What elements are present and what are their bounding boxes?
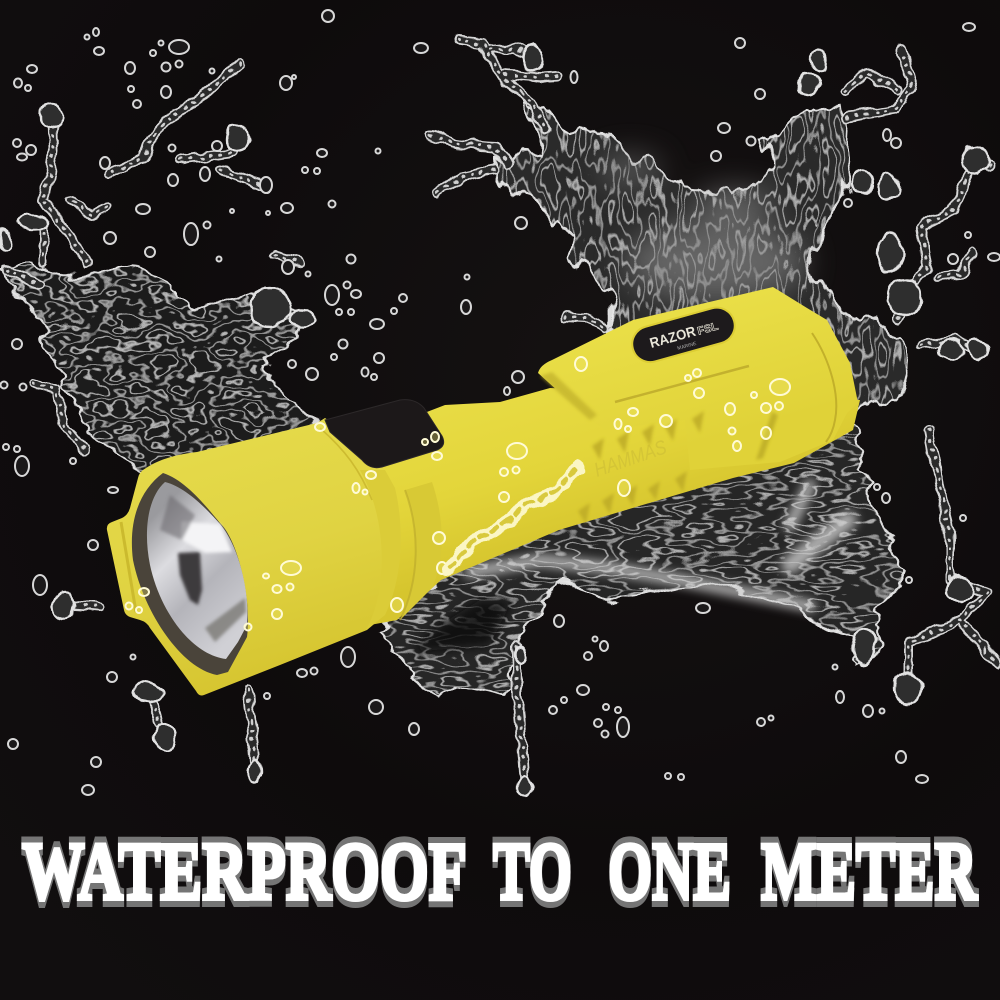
droplets on flashlight (126, 357, 790, 630)
flashlight body (370, 388, 860, 625)
badge brand: RAZOR (648, 323, 697, 351)
water dark pool (412, 600, 512, 652)
water splash: upper right mass (494, 97, 912, 420)
reflector lower shade (205, 598, 246, 642)
water splash: lower right mass (378, 425, 904, 697)
clip slot (615, 366, 749, 402)
tail cap seam (812, 333, 836, 442)
reflector dark bulb (178, 552, 202, 605)
reflector details (160, 495, 246, 642)
badge model: FSL (696, 320, 720, 338)
title word 2: TO (493, 825, 572, 917)
head shoulder seam (320, 428, 372, 500)
lower splash highlights (470, 485, 848, 606)
title word 1: WATERPROOF (22, 825, 467, 917)
clip underside shadow (540, 372, 597, 420)
reflector (147, 482, 247, 659)
water droplets (0, 10, 1000, 795)
water splash: left mass (0, 262, 322, 475)
body grip ridges (578, 411, 704, 524)
body brand emboss: HAMMAS (591, 436, 670, 482)
water splash on body (447, 468, 578, 570)
body dark streak (756, 412, 778, 460)
flashlight (107, 287, 860, 696)
badge backing (628, 303, 739, 366)
reflector top shade (160, 495, 195, 540)
belt clip and tail cap (538, 287, 858, 470)
water tendrils (5, 40, 997, 787)
rim shadow (121, 522, 136, 612)
water sheen upper (600, 156, 805, 302)
head back band (360, 470, 401, 630)
title: waterproof to one meter (22, 825, 978, 917)
logo badge (628, 303, 739, 366)
title word 3: ONE (608, 825, 731, 917)
reflector bright facet (182, 522, 232, 553)
power button (325, 400, 444, 468)
lens rim (132, 473, 248, 675)
neck ring shadow (400, 490, 416, 620)
badge sub line: MARINE (677, 341, 698, 352)
neck ring (400, 482, 442, 620)
water blobs (0, 45, 988, 797)
flashlight head (107, 418, 401, 696)
